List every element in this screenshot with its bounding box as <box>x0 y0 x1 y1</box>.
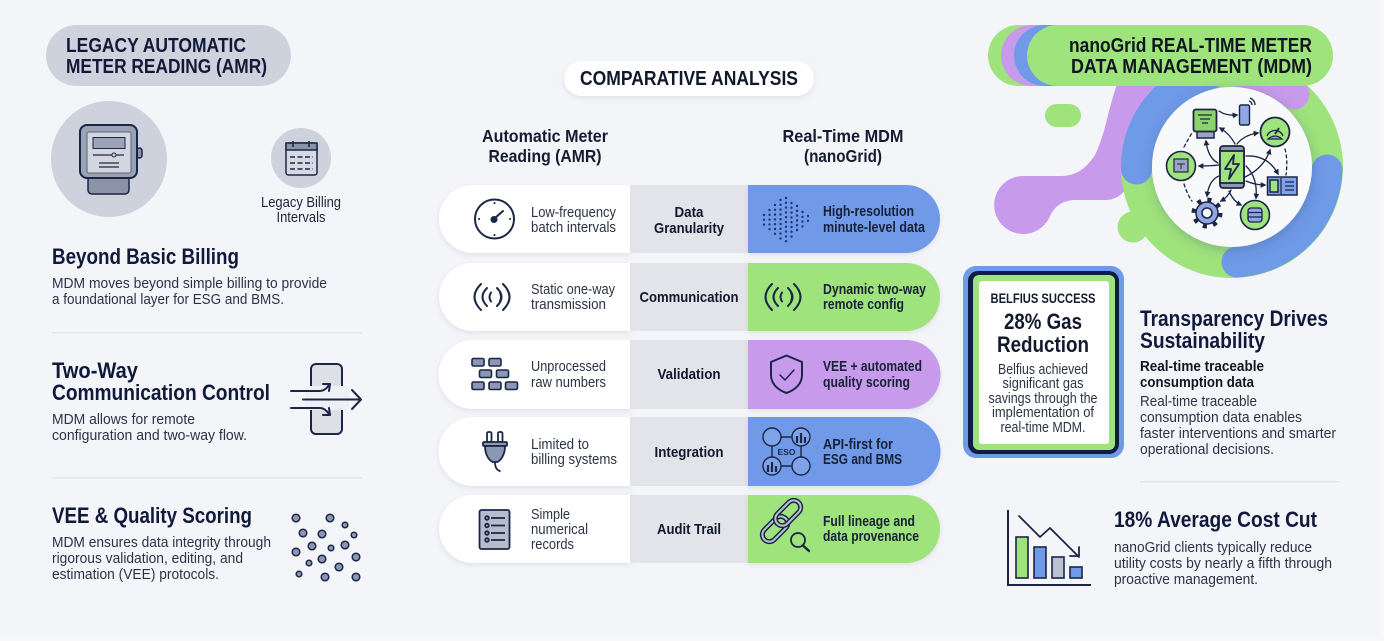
icon: database <box>1240 200 1270 230</box>
text: VEE automated quality scoring <box>823 358 922 391</box>
row: integration <box>438 417 940 486</box>
label: data granularity: Granularity <box>654 220 725 237</box>
icon: bricks <box>472 358 518 390</box>
text: limited to billing systems <box>531 436 617 468</box>
icon: battery <box>1166 152 1196 180</box>
column heading: real-time MDM: (nanoGrid) <box>804 146 882 166</box>
text: full lineage and data provenance: Full lineage and <box>823 513 915 530</box>
text block: transparency drives sustainability: operational decisions. <box>1140 442 1274 458</box>
icon: signal waves <box>766 284 800 310</box>
text: simple numerical records <box>531 506 588 553</box>
text: VEE automated quality scoring: VEE + automated <box>823 358 922 375</box>
icon: gauge <box>475 200 514 238</box>
text block: beyond basic billing <box>52 244 327 308</box>
text block: two-way communication control: Communication Control <box>52 380 270 405</box>
text: limited to billing systems: billing systems <box>531 451 617 468</box>
text block: two-way communication control: configuration and two-way flow. <box>52 428 247 444</box>
label: audit trail: Audit Trail <box>657 521 721 538</box>
text: unprocessed raw numbers <box>531 358 606 391</box>
icon: small phone <box>1240 98 1255 125</box>
text block: beyond basic billing: Beyond Basic Billing <box>52 244 239 269</box>
icon: plug <box>483 432 507 472</box>
text: simple numerical records: Simple <box>531 506 570 523</box>
heading pill: comparative analysis <box>564 61 814 96</box>
icon: waveform dots <box>764 198 808 242</box>
heading pill: comparative analysis: COMPARATIVE ANALYSIS <box>580 68 798 90</box>
text block: transparency drives sustainability: Transparency Drives <box>1140 306 1328 331</box>
icon: gear <box>1194 200 1220 226</box>
row: data granularity <box>439 185 940 253</box>
text: full lineage and data provenance: data provenance <box>823 528 919 545</box>
column heading: real-time MDM <box>782 126 904 166</box>
row: validation <box>438 340 940 409</box>
text: API-first for ESG and BMS: API-first for <box>823 436 893 453</box>
label: validation: Validation <box>658 366 720 383</box>
column heading: AMR: Automatic Meter <box>482 126 608 146</box>
text: limited to billing systems: Limited to <box>531 436 589 453</box>
icon: calendar <box>271 128 331 188</box>
callout: Belfius success: 28% Gas <box>1004 309 1082 334</box>
heading pill: legacy AMR: LEGACY AUTOMATIC <box>66 35 246 57</box>
label: communication: Communication <box>640 289 738 306</box>
diagram ring <box>1118 72 1328 262</box>
text block: 18% average cost cut: 18% Average Cost Cut <box>1114 507 1318 532</box>
text: API-first for ESG and BMS: ESG and BMS <box>823 451 902 468</box>
text: unprocessed raw numbers: raw numbers <box>531 374 606 391</box>
row: audit trail <box>439 495 940 563</box>
text block: transparency drives sustainability: Real-time traceable <box>1140 394 1257 410</box>
icon: gauge <box>1260 118 1290 146</box>
column heading: AMR <box>482 126 608 166</box>
text: high-resolution minute-level data <box>823 203 926 236</box>
panel: nanoGrid MDM column <box>963 25 1339 588</box>
text block: VEE and quality scoring: estimation (VEE) protocols. <box>52 567 219 583</box>
icon: shield check <box>771 356 802 393</box>
text block: 18% average cost cut: proactive management. <box>1114 572 1258 588</box>
callout: Belfius success: significant gas <box>1002 376 1084 392</box>
icon: central phone <box>1220 146 1244 188</box>
text: dynamic two-way remote config <box>823 281 927 313</box>
callout: Belfius success: savings through the <box>988 391 1098 407</box>
row: communication <box>439 263 940 331</box>
text: simple numerical records: records <box>531 536 574 553</box>
text block: two-way communication control <box>52 358 270 444</box>
text: low-frequency batch intervals: batch intervals <box>531 219 616 236</box>
text: dynamic two-way remote config: remote config <box>823 296 904 313</box>
label: integration: Integration <box>654 444 724 461</box>
text block: 18% average cost cut: utility costs by nearly a fifth through <box>1114 556 1332 572</box>
text: static one-way transmission <box>531 281 615 313</box>
icon: scattered data points <box>292 514 360 581</box>
text: VEE automated quality scoring: quality scoring <box>823 374 910 391</box>
heading pill: nanoGrid MDM <box>988 25 1333 86</box>
label: data granularity: Data <box>674 204 704 221</box>
label: legacy billing intervals: Intervals <box>276 209 326 226</box>
text block: transparency drives sustainability: consumption data <box>1140 374 1255 391</box>
text: simple numerical records: numerical <box>531 521 588 538</box>
callout: Belfius success: BELFIUS SUCCESS <box>990 291 1096 306</box>
text: low-frequency batch intervals <box>531 204 616 236</box>
label: legacy billing intervals: Legacy Billing <box>261 194 341 211</box>
text block: transparency drives sustainability <box>1140 306 1336 458</box>
text block: transparency drives sustainability: faster interventions and smarter <box>1140 426 1336 442</box>
icon: ESO network: ESO <box>778 447 796 457</box>
text: unprocessed raw numbers: Unprocessed <box>531 358 606 375</box>
text: static one-way transmission: Static one-way <box>531 281 615 298</box>
callout: Belfius success: Belfius achieved <box>998 362 1088 378</box>
heading pill: legacy AMR <box>46 25 291 86</box>
text block: 18% average cost cut <box>1114 507 1332 588</box>
icon: phone with two-way arrows <box>291 364 361 434</box>
icon: electric meter <box>51 101 167 217</box>
text: static one-way transmission: transmission <box>531 296 606 313</box>
icon: control panel <box>1268 177 1297 195</box>
diagram: device hub <box>1152 87 1312 247</box>
heading pill: legacy AMR: METER READING (AMR) <box>66 56 267 78</box>
heading pill: nanoGrid MDM: DATA MANAGEMENT (MDM) <box>1071 56 1312 78</box>
heading pill: nanoGrid MDM: nanoGrid REAL-TIME METER <box>1069 35 1312 57</box>
callout: Belfius success: Reduction <box>997 332 1089 357</box>
text: low-frequency batch intervals: Low-frequency <box>531 204 616 221</box>
text block: transparency drives sustainability: Real-time traceable <box>1140 358 1264 375</box>
text block: beyond basic billing: a foundational layer for ESG and BMS. <box>52 292 284 308</box>
icon: ESO network <box>763 428 810 475</box>
text: high-resolution minute-level data: minute-level data <box>823 219 926 236</box>
text block: transparency drives sustainability: consumption data enables <box>1140 410 1302 426</box>
callout: Belfius success: implementation of <box>992 405 1095 421</box>
icon: chain and magnifier <box>759 497 809 551</box>
text block: VEE and quality scoring: VEE & Quality Scoring <box>52 503 252 528</box>
icon: signal waves <box>474 284 510 310</box>
column heading: AMR: Reading (AMR) <box>488 146 602 166</box>
text: API-first for ESG and BMS <box>823 436 902 468</box>
text block: two-way communication control: MDM allows for remote <box>52 412 195 428</box>
text block: beyond basic billing: MDM moves beyond simple billing to provide <box>52 276 327 292</box>
decoration: purple blob <box>994 84 1180 234</box>
arrows between devices <box>1184 111 1287 205</box>
text block: VEE and quality scoring <box>52 503 271 583</box>
text: high-resolution minute-level data: High-resolution <box>823 203 914 220</box>
text block: VEE and quality scoring: rigorous validation, editing, and <box>52 551 243 567</box>
chart: falling cost bars <box>1008 510 1091 585</box>
panel: comparative analysis <box>438 61 940 563</box>
text block: 18% average cost cut: nanoGrid clients typically reduce <box>1114 540 1312 556</box>
callout: Belfius success <box>963 266 1124 458</box>
text block: two-way communication control: Two-Way <box>52 358 139 383</box>
label: data granularity <box>654 204 725 237</box>
text: dynamic two-way remote config: Dynamic two-way <box>823 281 927 298</box>
label: legacy billing intervals <box>261 194 341 226</box>
icon: smart meter <box>1194 110 1216 138</box>
text: full lineage and data provenance <box>823 513 919 545</box>
text block: VEE and quality scoring: MDM ensures data integrity through <box>52 535 271 551</box>
panel: legacy AMR column <box>46 25 362 583</box>
column heading: real-time MDM: Real-Time MDM <box>782 126 904 146</box>
text block: transparency drives sustainability: Sustainability <box>1140 328 1266 353</box>
decoration: small green pill <box>1045 104 1081 127</box>
icon: list document <box>480 510 510 549</box>
callout: Belfius success: real-time MDM. <box>1000 420 1086 436</box>
